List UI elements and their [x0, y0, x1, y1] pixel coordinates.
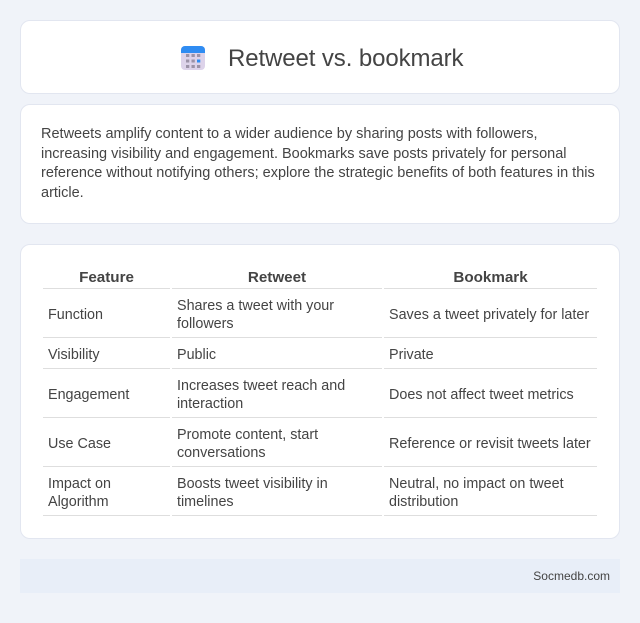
row: impact on algorithm: Algorithm	[48, 494, 109, 510]
row: impact on algorithm: Impact on	[48, 476, 111, 492]
row: use case: conversations	[177, 445, 266, 461]
row: visibility: Visibility	[48, 347, 100, 363]
row: use case: Use Case	[48, 436, 111, 452]
row: engagement	[43, 378, 597, 418]
table: comparison	[43, 269, 597, 516]
text block: introduction: increasing visibility and engagement. Bookmarks save posts privately for personal	[41, 146, 566, 162]
icon: calendar	[181, 46, 205, 70]
footer text: Socmedb.com	[533, 569, 610, 583]
text block: introduction: article.	[41, 185, 84, 201]
panel: comparison table	[20, 244, 620, 539]
row: impact on algorithm: distribution	[389, 494, 458, 510]
row: impact on algorithm	[43, 476, 597, 516]
row: function: Saves a tweet privately for later	[389, 307, 589, 323]
row: use case: Reference or revisit tweets later	[389, 436, 591, 452]
row: function: Shares a tweet with your	[177, 298, 334, 314]
row: function	[43, 298, 597, 338]
text block: introduction	[41, 126, 595, 201]
row: impact on algorithm: Boosts tweet visibility in	[177, 476, 328, 492]
text block: introduction: Retweets amplify content to a wider audience by sharing posts with followers,	[41, 126, 537, 142]
row: impact on algorithm: timelines	[177, 494, 234, 510]
table header row: Feature	[79, 269, 134, 286]
row: function: followers	[177, 316, 234, 332]
row: visibility: Private	[389, 347, 434, 363]
row: impact on algorithm: Neutral, no impact on tweet	[389, 476, 564, 492]
row: engagement: Engagement	[48, 387, 129, 403]
row: engagement: interaction	[177, 396, 243, 412]
panel: introduction	[20, 104, 620, 224]
table header row: Bookmark	[453, 269, 528, 286]
panel: title header	[20, 20, 620, 94]
row: function: Function	[48, 307, 103, 323]
text block: introduction: reference without notifying others; explore the strategic benefits of both features in this	[41, 165, 595, 181]
row: engagement: Increases tweet reach and	[177, 378, 345, 394]
footer bar	[20, 559, 620, 593]
row: use case: Promote content, start	[177, 427, 318, 443]
row: visibility: Public	[177, 347, 216, 363]
table header row	[43, 269, 597, 289]
row: visibility	[43, 347, 597, 369]
row: engagement: Does not affect tweet metrics	[389, 387, 574, 403]
title: Retweet vs. bookmark	[228, 45, 463, 72]
table header row: Retweet	[248, 269, 306, 286]
row: use case	[43, 427, 597, 467]
